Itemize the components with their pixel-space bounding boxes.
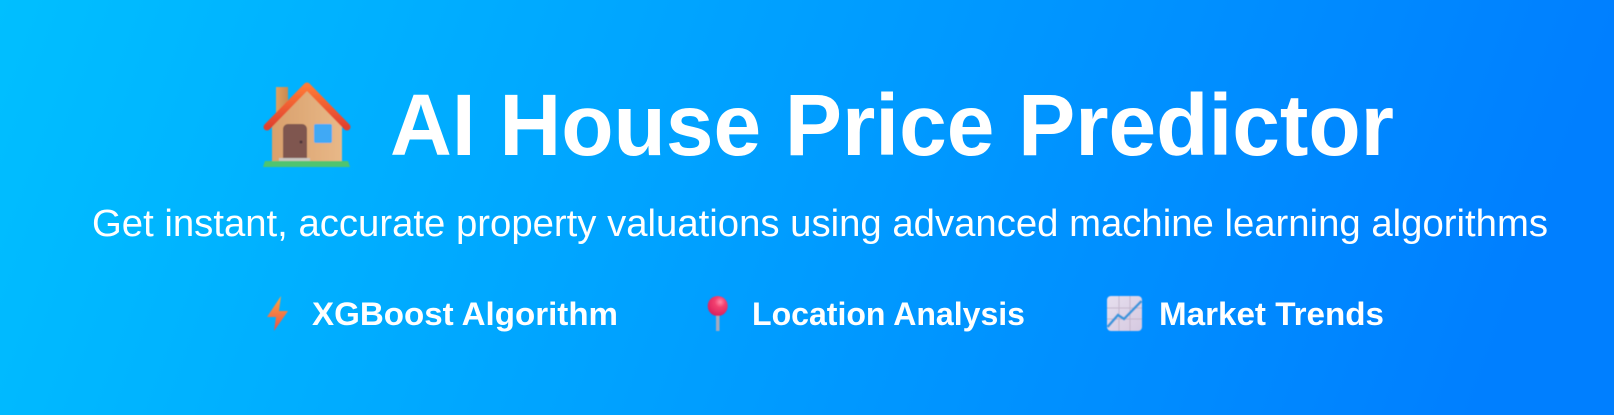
- icon: house: [263, 86, 350, 167]
- feature: XGBoost Algorithm: [267, 296, 618, 332]
- feature label: XGBoost Algorithm: XGBoost Algorithm: [312, 296, 618, 332]
- title: [263, 77, 1394, 174]
- feature: Location Analysis: [708, 296, 1025, 332]
- feature: Market Trends: [1107, 296, 1384, 332]
- title text: AI House Price Predictor: [390, 77, 1394, 174]
- feature label: Market Trends: Market Trends: [1159, 296, 1384, 332]
- icon: trend chart: [1107, 296, 1142, 331]
- feature label: Location Analysis: Location Analysis: [752, 296, 1025, 332]
- subtitle: Get instant, accurate property valuations using advanced machine learning algorithms: [92, 203, 1548, 245]
- icon: lightning bolt: [267, 296, 288, 331]
- icon: map pin: [708, 296, 728, 331]
